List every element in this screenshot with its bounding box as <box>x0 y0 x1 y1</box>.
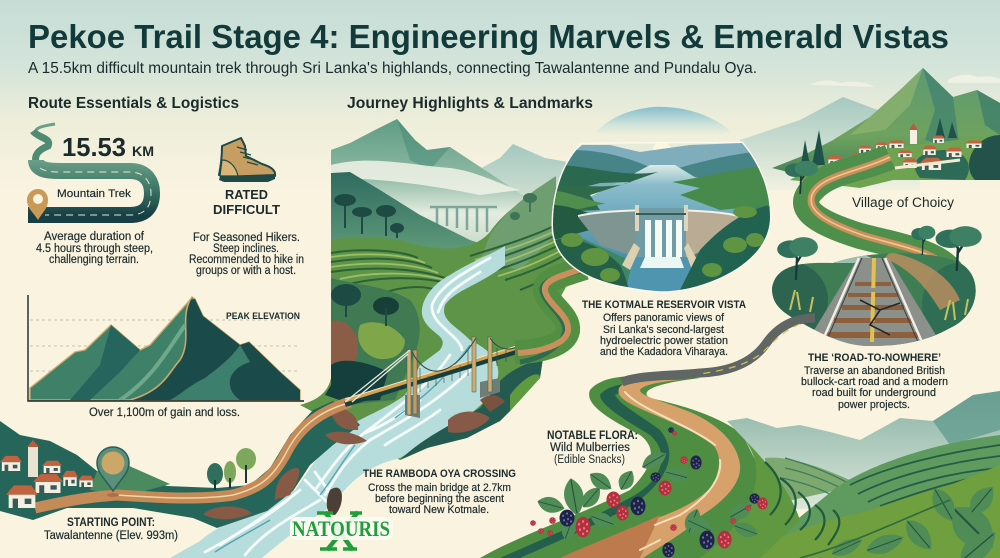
village houses <box>827 135 983 170</box>
illustration: bottom-left road band and starting village <box>0 401 367 528</box>
text: duration: challenging terrain. <box>49 254 139 266</box>
text: road to nowhere: THE ‘ROAD-TO-NOWHERE’ <box>808 352 941 364</box>
label: Village of Choicy: Village of Choicy <box>852 195 954 210</box>
viaduct <box>430 207 497 232</box>
text: Ramboda Oya crossing: Cross the main bridge at 2.7km <box>368 482 511 494</box>
text: duration: Average duration of <box>44 231 145 243</box>
illustration: road from bridge to dam <box>515 268 585 362</box>
dark ridge <box>331 172 500 300</box>
label: mountain trek: Mountain Trek <box>57 188 132 200</box>
foreground woods <box>555 239 628 288</box>
rocks <box>203 409 367 519</box>
main mountain <box>331 119 530 245</box>
sky dome <box>596 107 730 138</box>
illustration: top right mountains and village <box>740 68 1000 190</box>
text: difficulty: Steep inclines. <box>213 243 279 255</box>
illustration: trail road icon <box>27 124 152 223</box>
church tower <box>909 123 918 144</box>
label: rated difficult: DIFFICULT <box>213 202 280 217</box>
label: rated difficult: RATED <box>225 187 268 202</box>
subtitle: A 15.5km difficult mountain trek through Sri Lanka's highlands, connecting Tawalantenne and Pundalu Oya. <box>28 60 757 77</box>
trees on ridge <box>334 194 404 238</box>
text: Ramboda Oya crossing: toward New Kotmale. <box>389 504 489 516</box>
illustration: road-to-nowhere vignette <box>772 226 982 346</box>
text: notable flora <box>547 430 638 466</box>
title: Pekoe Trail Stage 4: Engineering Marvels & Emerald Vistas <box>28 18 949 55</box>
illustration: Kotmale dam vignette <box>550 107 775 300</box>
stat: distance: KM <box>132 143 154 159</box>
text: Kotmale reservoir: THE KOTMALE RESERVOIR VISTA <box>582 299 746 311</box>
trees above vignette <box>777 226 982 280</box>
tea terraces <box>331 225 570 296</box>
logo: Natouris <box>290 512 393 550</box>
illustration: central landscape <box>170 119 583 558</box>
berries <box>530 427 768 558</box>
text: difficulty: For Seasoned Hikers. <box>193 232 300 244</box>
label: peak elevation: PEAK ELEVATION <box>226 311 300 321</box>
illustration: winding road to the road-to-nowhere <box>806 157 960 290</box>
text: road to nowhere: bullock-cart road and a modern <box>801 376 948 388</box>
right hill <box>480 176 556 270</box>
chart: elevation profile <box>28 295 304 401</box>
terrain base <box>300 180 583 460</box>
text: difficulty: Recommended to hike in <box>189 254 304 266</box>
text: road to nowhere: Traverse an abandoned British <box>804 365 945 377</box>
label: rated difficult <box>213 187 280 217</box>
grey road <box>622 318 815 382</box>
text: Kotmale reservoir <box>582 299 746 358</box>
text: Kotmale reservoir: and the Kadadora Viharaya. <box>600 346 728 358</box>
text: difficulty <box>189 232 304 277</box>
text: road to nowhere <box>801 352 948 411</box>
text: notable flora: (Edible Snacks) <box>554 454 625 466</box>
road <box>35 402 350 508</box>
text: notable flora: NOTABLE FLORA: <box>547 430 638 442</box>
icon: roadside tree <box>785 161 818 194</box>
river <box>170 246 505 558</box>
text: Ramboda Oya crossing <box>363 468 516 516</box>
heading: journey highlights: Journey Highlights & Landmarks <box>347 95 593 112</box>
text: Ramboda Oya crossing: THE RAMBODA OYA CROSSING <box>363 468 516 480</box>
right rocks <box>400 358 543 460</box>
bowl <box>553 143 770 291</box>
illustration: lower right tea hills <box>700 391 1000 558</box>
text: road to nowhere: road built for underground <box>812 387 936 399</box>
text: Kotmale reservoir: Sri Lanka's second-largest <box>603 324 724 336</box>
text: Kotmale reservoir: hydroelectric power station <box>600 335 728 347</box>
text: Ramboda Oya crossing: before beginning the ascent <box>375 493 504 505</box>
text: Kotmale reservoir: Offers panoramic views of <box>603 312 725 324</box>
caption: elevation gain: Over 1,100m of gain and loss. <box>89 405 240 419</box>
stat: distance: 15.53 <box>62 132 126 162</box>
heading: route essentials: Route Essentials & Logistics <box>28 95 239 112</box>
text: difficulty: groups or with a host. <box>196 265 296 277</box>
tea leaves <box>800 481 1000 558</box>
far mountains <box>440 144 568 240</box>
icon: start map pin <box>97 447 129 497</box>
start village <box>0 440 94 508</box>
icon: hiking boot <box>219 138 275 182</box>
dam wall <box>578 212 636 254</box>
text: starting point: Tawalantenne (Elev. 993m) <box>44 530 178 542</box>
left bank with trees and rocks <box>331 278 420 405</box>
text: starting point: STARTING POINT: <box>67 517 155 529</box>
text: notable flora: Wild Mulberries <box>550 442 630 454</box>
mist <box>331 161 520 195</box>
illustration: lower road with green verge <box>480 318 815 558</box>
map pin <box>27 189 48 220</box>
leaves <box>535 447 761 542</box>
text: duration <box>36 231 153 266</box>
trees near road <box>207 448 256 490</box>
illustration: suspension bridge <box>345 337 520 418</box>
logo: Natouris: NATOURIS <box>292 516 390 541</box>
illustration: wild mulberries <box>530 427 768 558</box>
tan road <box>563 380 740 558</box>
cypress trees <box>801 118 957 165</box>
text: duration: 4.5 hours through steep, <box>36 243 153 255</box>
text: road to nowhere: power projects. <box>838 399 910 411</box>
text: starting point <box>44 517 178 542</box>
